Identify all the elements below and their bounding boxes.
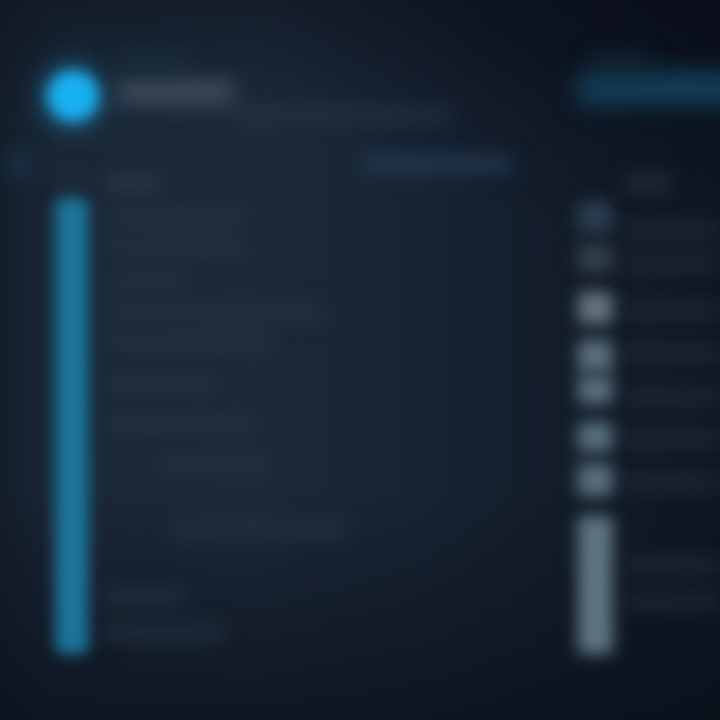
text block: blurred column marker (60, 172, 84, 184)
icon: faint side marker (8, 152, 32, 178)
heading: blurred left title (118, 80, 234, 104)
text block: blurred right list (630, 173, 714, 610)
text block: blurred eyebrow (115, 56, 190, 67)
text block: blurred right eyebrow (590, 54, 650, 65)
text block: blurred column label (104, 178, 162, 190)
bar: right column segments (568, 196, 624, 664)
text block: blurred link row (362, 157, 512, 171)
text block: blurred left list (109, 590, 217, 642)
heading: blurred right title (578, 72, 720, 104)
bar: vertical blue timeline (55, 198, 89, 654)
icon: glowing blue circle (47, 70, 99, 122)
text block: blurred subtitle (236, 110, 451, 121)
